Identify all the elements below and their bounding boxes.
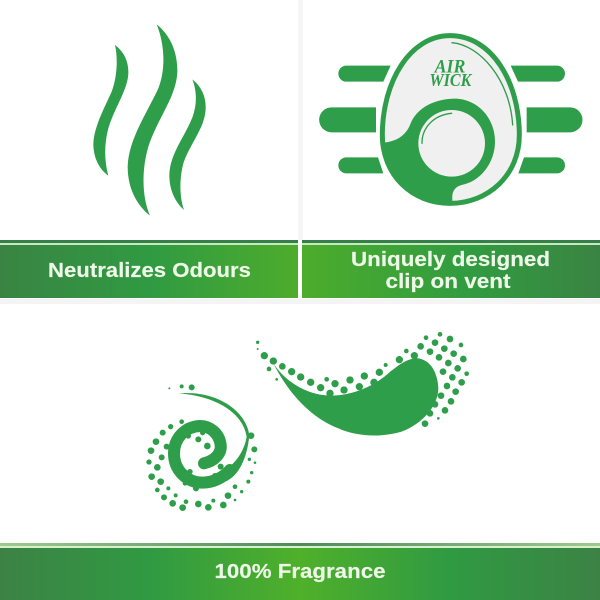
highlight arcs xyxy=(422,43,513,143)
drop body xyxy=(273,358,438,435)
spiral tail xyxy=(178,393,249,482)
logo: AIR xyxy=(434,56,465,77)
spiral ring xyxy=(174,426,230,483)
banner: clip on vent xyxy=(302,240,600,298)
icon: fragrance drop xyxy=(256,332,469,435)
panel: 100% fragrance xyxy=(0,332,600,600)
drop dots xyxy=(256,332,469,427)
banner: clip on vent: clip on vent xyxy=(386,271,511,293)
banner: clip on vent: Uniquely designed xyxy=(351,249,550,271)
vent bars xyxy=(319,66,582,173)
panel: clip on vent xyxy=(302,36,600,298)
logo xyxy=(429,56,473,90)
spiral dots xyxy=(146,384,257,511)
panel: neutralizes odours xyxy=(0,24,298,298)
banner: 100% fragrance xyxy=(0,543,600,600)
icon: fragrance spiral xyxy=(146,384,257,511)
swoosh ring xyxy=(385,98,495,201)
ring opening xyxy=(418,110,485,177)
banner: 100% fragrance: 100% Fragrance xyxy=(214,561,386,583)
egg body xyxy=(382,36,519,203)
banner: neutralizes odours xyxy=(0,240,298,298)
logo: WICK xyxy=(429,70,473,90)
icon: smoke waves xyxy=(93,24,206,216)
icon: vent clip xyxy=(319,36,582,217)
banner: neutralizes odours: Neutralizes Odours xyxy=(48,260,251,282)
